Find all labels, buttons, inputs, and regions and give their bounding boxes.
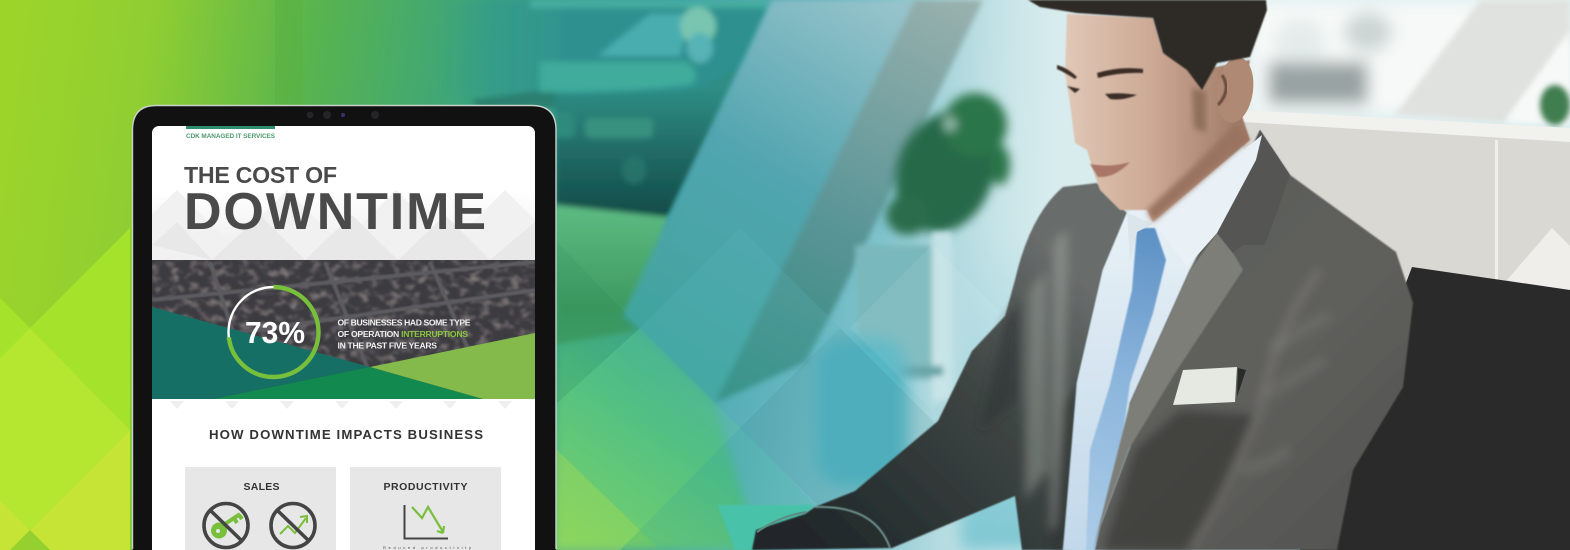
tablet screen	[152, 126, 535, 550]
jacket left sleeve and hand	[752, 183, 1127, 550]
aerial city texture	[152, 260, 535, 367]
office chair	[1300, 267, 1570, 550]
cuff edge	[815, 507, 890, 548]
jacket dark front panel	[1103, 410, 1255, 550]
title	[184, 167, 484, 230]
ear	[1213, 55, 1257, 125]
white collar	[1155, 135, 1262, 267]
jacket armhole seam highlight	[1190, 270, 1320, 550]
card: productivity	[350, 467, 501, 550]
neck and face	[1065, 14, 1250, 222]
header brand	[186, 126, 275, 138]
sideburn stubble	[1192, 88, 1206, 133]
stat banner	[152, 260, 535, 399]
icon: no growth	[271, 504, 315, 548]
blurred car in the background	[440, 0, 772, 345]
progress ring 73 percent	[228, 287, 318, 377]
shirt	[1063, 140, 1260, 550]
diamonds over the background	[0, 228, 1020, 550]
title: THE COST OF	[184, 162, 337, 188]
banner teal triangle	[152, 307, 370, 399]
header diamond pattern	[152, 190, 535, 261]
blurred planter and floor	[855, 232, 952, 400]
stat description: OF OPERATION INTERRUPTIONS	[338, 329, 468, 339]
hair	[1028, 0, 1267, 90]
blurred plant	[879, 93, 1011, 247]
jacket upper lapel	[1217, 130, 1290, 253]
pocket square	[1173, 367, 1246, 405]
jacket body	[1095, 130, 1413, 550]
banner green triangle	[213, 367, 483, 399]
stat description	[338, 320, 470, 348]
card: sales	[185, 467, 336, 550]
stat value: 73%	[245, 315, 305, 350]
small diamond row	[170, 401, 512, 409]
tablet device	[132, 106, 556, 550]
photo: man in grey suit	[752, 0, 1570, 550]
title: DOWNTIME	[184, 183, 486, 241]
section heading: HOW DOWNTIME IMPACTS BUSINESS	[209, 427, 483, 442]
card: sales: SALES	[244, 481, 280, 493]
tablet camera dots	[307, 111, 379, 119]
icon: declining chart	[404, 505, 448, 538]
stat description: IN THE PAST FIVE YEARS	[338, 340, 437, 350]
brow, eye and mouth	[1057, 65, 1143, 100]
tablet body	[132, 106, 556, 550]
card caption cut off by frame: Reduced productivity	[383, 545, 471, 550]
cabinet	[1243, 110, 1570, 300]
stat description: OF BUSINESSES HAD SOME TYPE	[338, 318, 471, 328]
sleeve folds	[980, 230, 1077, 550]
blue tie	[1086, 228, 1166, 550]
card: productivity: PRODUCTIVITY	[384, 481, 468, 493]
jacket lapel	[1093, 233, 1243, 550]
header brand: CDK MANAGED IT SERVICES	[186, 133, 276, 140]
banner lime triangle	[370, 333, 535, 399]
background window highlight and blurred machine	[1250, 0, 1570, 115]
icon: no key	[204, 504, 248, 548]
lower-left green floor	[555, 300, 760, 550]
neck shadow	[1147, 122, 1248, 222]
jacket sleeve highlights	[1240, 315, 1330, 470]
tablet rim	[132, 106, 556, 549]
blurred pillar	[622, 0, 983, 403]
